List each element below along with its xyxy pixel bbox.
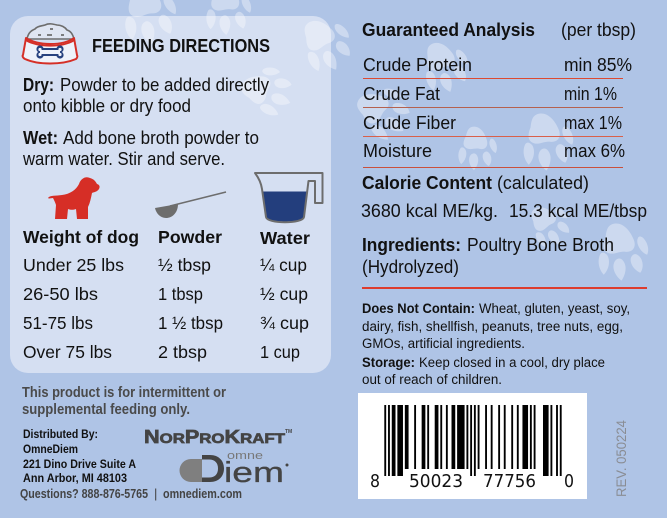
text: dry directions: Powder to be added directly	[60, 75, 269, 95]
text: contact line: |	[154, 486, 157, 501]
text: contact line: Questions? 888-876-5765	[20, 486, 148, 501]
text: distributor address	[23, 429, 136, 485]
text: calorie content: 3680 kcal ME/kg.	[361, 200, 498, 221]
icon: measuring scoop	[155, 192, 226, 218]
text: does not contain: Does Not Contain:	[362, 301, 475, 316]
logo: omne Diem	[180, 450, 288, 489]
table: feeding amounts	[23, 227, 310, 362]
heading: guaranteed analysis	[362, 19, 636, 40]
icon: measuring cup with water	[255, 173, 322, 222]
barcode: 8	[370, 471, 380, 492]
barcode: 50023	[409, 471, 463, 492]
text: ingredients: Ingredients:	[362, 234, 461, 255]
text: ingredients	[362, 234, 614, 277]
text: intermittent feeding note: This product is for intermittent or	[22, 385, 226, 401]
table: guaranteed analysis values: Crude Protein	[363, 54, 472, 75]
table: guaranteed analysis values: Crude Fiber	[363, 112, 456, 133]
table: guaranteed analysis values	[363, 54, 632, 168]
text: does not contain: GMOs, artificial ingredients.	[362, 336, 525, 351]
logo: NorProKraft: NORPROKRAFT	[144, 427, 286, 447]
text: storage: out of reach of children.	[362, 372, 502, 387]
text: does not contain: dairy, fish, shellfish, peanuts, tree nuts, egg,	[362, 319, 623, 334]
text: dry directions: Dry:	[23, 75, 54, 95]
table: feeding amounts: 1 cup	[260, 342, 300, 362]
text: storage	[362, 355, 605, 387]
text: wet directions	[22, 128, 259, 169]
text: storage: Keep closed in a cool, dry place	[419, 355, 605, 370]
text: distributor address: Distributed By:	[23, 429, 98, 441]
background paw prints	[114, 0, 654, 285]
text: revision code: REV. 050224	[614, 420, 629, 497]
barcode: 77756	[483, 471, 536, 492]
table: feeding amounts: Under 25 lbs	[23, 255, 124, 275]
text: calorie content: 15.3 kcal ME/tbsp	[509, 200, 647, 221]
icon: dog food bowl	[23, 24, 77, 64]
text: does not contain	[362, 301, 630, 351]
logo: NorProKraft: TM	[285, 429, 292, 435]
logo: omne Diem: iem	[224, 457, 284, 489]
barcode: 0	[564, 471, 574, 492]
table: guaranteed analysis values: max 6%	[564, 140, 625, 161]
table: feeding amounts: ½ tbsp	[158, 255, 211, 275]
table: feeding amounts: 1 ½ tbsp	[158, 313, 223, 333]
text: calorie content: (calculated)	[497, 172, 589, 193]
table: feeding amounts: 1 tbsp	[158, 284, 203, 304]
table: feeding amounts: ½ cup	[260, 284, 308, 304]
heading: guaranteed analysis: (per tbsp)	[561, 19, 636, 40]
heading: feeding directions: FEEDING DIRECTIONS	[92, 35, 270, 56]
text: ingredients: (Hydrolyzed)	[362, 256, 459, 277]
panel: feeding directions	[10, 16, 331, 373]
table: guaranteed analysis values: max 1%	[564, 112, 622, 133]
text: does not contain: Wheat, gluten, yeast, soy,	[479, 301, 630, 316]
table: feeding amounts: Powder	[158, 227, 222, 247]
table: guaranteed analysis values: min 85%	[564, 54, 632, 75]
text: storage: Storage:	[362, 355, 415, 370]
table: feeding amounts: 51-75 lbs	[23, 313, 93, 333]
icon: red dog	[48, 177, 100, 219]
text: intermittent feeding note	[22, 385, 226, 418]
table: guaranteed analysis values: Crude Fat	[363, 83, 440, 104]
text: dry directions: onto kibble or dry food	[23, 96, 191, 116]
table: feeding amounts: Water	[260, 228, 310, 248]
table: guaranteed analysis values: Moisture	[363, 140, 432, 161]
text: dry directions	[23, 75, 269, 116]
text: distributor address: OmneDiem	[23, 444, 78, 456]
text: distributor address: 221 Dino Drive Suite A	[23, 459, 136, 471]
text: calorie content: Calorie Content	[362, 172, 492, 193]
text: wet directions: Wet:	[23, 128, 58, 148]
text: wet directions: warm water. Stir and serve.	[22, 149, 225, 169]
text: calorie content	[361, 172, 647, 221]
table: feeding amounts: 2 tbsp	[158, 342, 207, 362]
text: contact line: omnediem.com	[163, 486, 242, 501]
text: distributor address: Ann Arbor, MI 48103	[23, 473, 127, 485]
table: feeding amounts: Over 75 lbs	[23, 342, 112, 362]
divider: red rule	[362, 287, 647, 289]
table: feeding amounts: ¾ cup	[260, 313, 309, 333]
table: guaranteed analysis values: min 1%	[564, 83, 617, 104]
logo: omne Diem: omne	[227, 450, 263, 462]
text: wet directions: Add bone broth powder to	[63, 128, 259, 148]
table: feeding amounts: 26-50 lbs	[23, 284, 98, 304]
table: feeding amounts: ¼ cup	[260, 255, 307, 275]
table: feeding amounts: Weight of dog	[23, 227, 139, 247]
barcode	[358, 393, 587, 499]
text: ingredients: Poultry Bone Broth	[467, 234, 614, 255]
text: intermittent feeding note: supplemental feeding only.	[22, 402, 190, 418]
heading: guaranteed analysis: Guaranteed Analysis	[362, 19, 535, 40]
